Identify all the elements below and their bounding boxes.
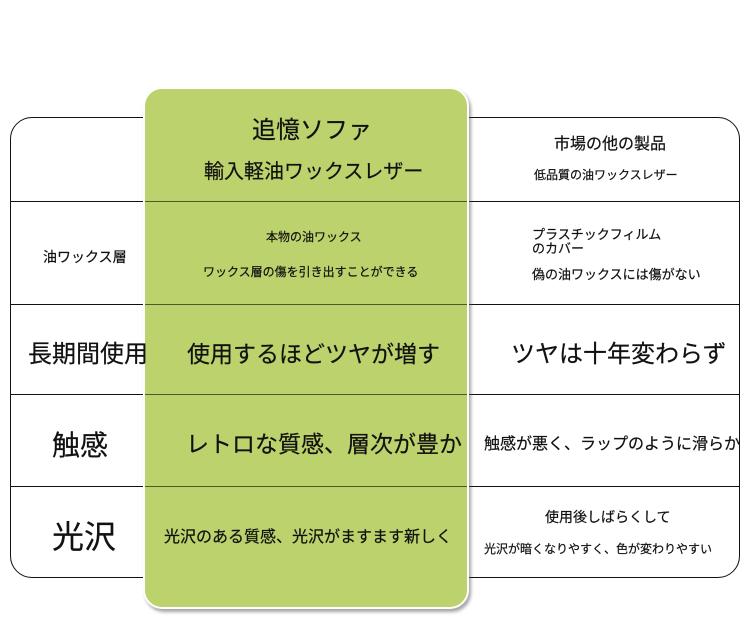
row label: 光沢: 光沢 <box>52 519 116 555</box>
row label: 触感: 触感 <box>52 430 108 461</box>
panel text: glossy texture: 光沢のある質感、光沢がますます新しく <box>164 529 452 546</box>
panel text: gloss with use: 使用するほどツヤが増す <box>187 341 440 367</box>
row label: 油ワックス層: 油ワックス層 <box>43 249 127 265</box>
right text: fake wax: 偽の油ワックスには傷がない <box>532 267 701 282</box>
panel heading: 追憶ソファ: 追憶ソファ <box>252 117 372 144</box>
right text: poor touch: 触感が悪く、ラップのように滑らか <box>484 436 740 453</box>
panel text: 本物の油ワックス: 本物の油ワックス <box>266 230 362 244</box>
row label: 長期間使用: 長期間使用 <box>28 341 148 368</box>
right text: plastic film cover: のカバー <box>532 241 584 256</box>
comparison table outline <box>10 117 740 578</box>
right text: plastic film cover: プラスチックフィルム <box>532 227 661 242</box>
right text: unchanged gloss: ツヤは十年変わらず <box>511 341 727 368</box>
panel text: retro texture: レトロな質感、層次が豊か <box>186 431 462 457</box>
highlighted panel: 追憶ソファ column <box>143 87 469 609</box>
right heading: 市場の他の製品: 市場の他の製品 <box>554 136 666 153</box>
panel subheading: 輸入軽油ワックスレザー: 輸入軽油ワックスレザー <box>204 161 423 183</box>
right subheading: 低品質の油ワックスレザー: 低品質の油ワックスレザー <box>534 168 678 182</box>
panel text: wax layer scratches: ワックス層の傷を引き出すことができる <box>203 265 418 279</box>
right text: plastic film cover <box>532 227 661 256</box>
right text: gloss darkens: 光沢が暗くなりやすく、色が変わりやすい <box>484 542 712 556</box>
right text: after use: 使用後しばらくして <box>545 509 671 525</box>
